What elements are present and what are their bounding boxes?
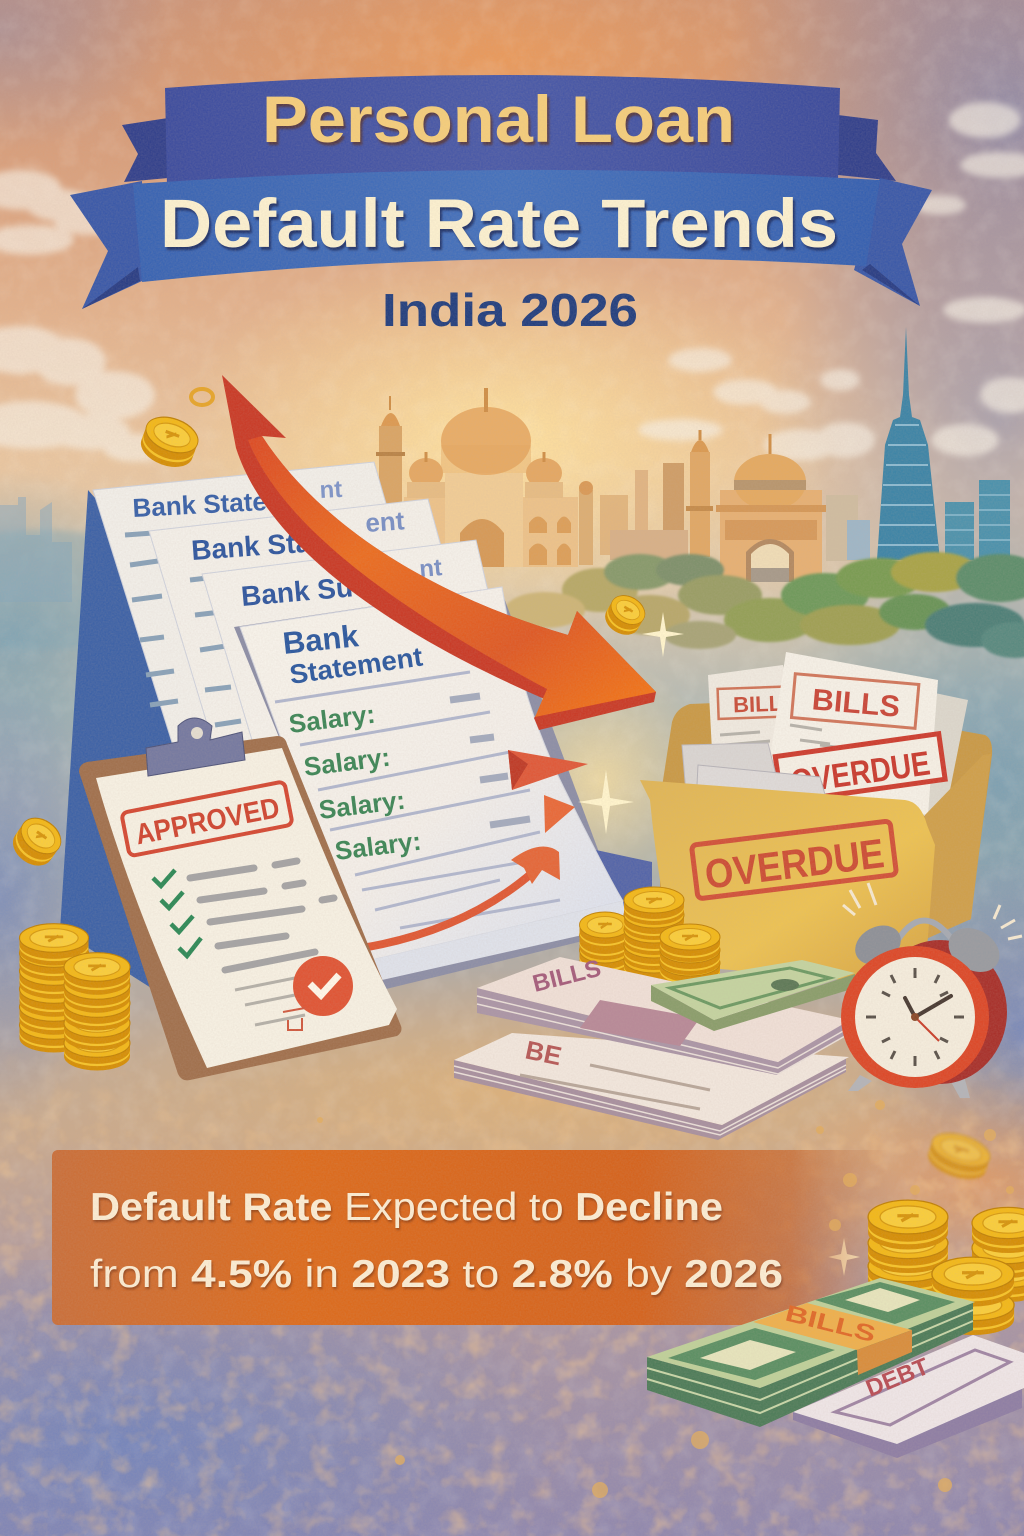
green banknotes bbox=[651, 960, 855, 1031]
statement sheet 3 bbox=[202, 540, 530, 800]
tucked sheets bbox=[682, 743, 778, 793]
callout line 2: from 4.5% in 2023 to 2.8% by 2026 bbox=[90, 1253, 783, 1296]
main bank statement bbox=[240, 587, 627, 980]
left coin stacks bbox=[20, 924, 130, 1070]
heading line 1: Personal Loan bbox=[262, 82, 735, 156]
salary rows: Salary: bbox=[287, 699, 377, 739]
lower bill stack: BE bbox=[523, 1035, 564, 1071]
bill right bbox=[765, 652, 938, 815]
form paper bbox=[96, 748, 397, 1068]
centre coin stacks bbox=[580, 887, 720, 988]
metal clip bbox=[146, 718, 245, 776]
heading line 2: Default Rate Trends bbox=[160, 185, 838, 262]
callout line 1: Default Rate Expected to Decline bbox=[90, 1186, 723, 1229]
debt paper: DEBT bbox=[862, 1353, 933, 1403]
overdue folder: BILL bbox=[733, 691, 782, 717]
green money bundle: BILLS bbox=[783, 1300, 878, 1347]
clipboard approved form bbox=[79, 718, 402, 1080]
statement sheet 2: Bank Sta bbox=[190, 527, 312, 566]
blurred floating coin bbox=[924, 1127, 994, 1185]
small red arrow triangles bbox=[508, 750, 588, 833]
sparkles bbox=[578, 612, 860, 1276]
blue corner behind statement bbox=[596, 850, 652, 922]
statement sheet 1: nt bbox=[319, 476, 343, 504]
statement sheet 1: Bank State bbox=[132, 486, 268, 523]
salary rows: Salary: bbox=[302, 742, 392, 782]
statement sheet 3: Bank Su bbox=[240, 571, 354, 612]
upper bill stack bbox=[477, 955, 850, 1075]
lower right coin stacks bbox=[868, 1200, 1024, 1335]
large overdue stamp: OVERDUE bbox=[702, 830, 887, 898]
hazy left city and hills bbox=[0, 497, 180, 650]
ribbon back tails bbox=[122, 115, 896, 182]
folder back bbox=[660, 700, 992, 920]
clock face bbox=[855, 957, 975, 1077]
clock body back bbox=[873, 940, 1007, 1084]
ringing marks bbox=[843, 883, 1022, 939]
ribbon front tails bbox=[70, 178, 932, 309]
blue binder backing bbox=[60, 490, 330, 1000]
debt paper bbox=[793, 1335, 1024, 1458]
back sheet right bbox=[923, 692, 968, 825]
rim bbox=[841, 946, 989, 1088]
treeline bbox=[505, 552, 1024, 658]
salary rows bbox=[287, 699, 423, 866]
statement sheet 1 bbox=[93, 462, 460, 800]
statement sheet 2: ent bbox=[364, 505, 406, 538]
landmark: towers and minaret bbox=[600, 430, 713, 560]
title banner bbox=[70, 75, 932, 309]
feet bbox=[848, 1075, 970, 1098]
overdue folder: BILLS bbox=[811, 683, 901, 724]
approved stamp: APPROVED bbox=[133, 792, 282, 851]
upper bill stack: BILLS bbox=[530, 955, 604, 998]
floating coins upper bbox=[6, 389, 650, 873]
alarm clock bbox=[841, 883, 1022, 1098]
bundle band bbox=[753, 1303, 912, 1350]
folder front bbox=[640, 780, 935, 980]
green money bundle bbox=[647, 1278, 975, 1427]
clouds bbox=[0, 102, 1024, 462]
callout panel bbox=[52, 1150, 892, 1325]
landmark: domed palace bbox=[376, 388, 593, 567]
rising red arrow on statement bbox=[362, 847, 560, 948]
landmark: blue skyscraper and towers bbox=[877, 327, 1010, 562]
bells bbox=[848, 918, 908, 972]
lower bill stack bbox=[454, 1033, 849, 1140]
large orange trend arrow bbox=[222, 375, 656, 730]
red seal bbox=[293, 956, 353, 1016]
salary rows: Salary: bbox=[333, 826, 423, 866]
scattered gold flecks bbox=[317, 1100, 1014, 1498]
small overdue stamp: OVERDUE bbox=[788, 744, 932, 802]
salary rows: Salary: bbox=[317, 785, 407, 825]
clipboard board bbox=[79, 736, 402, 1080]
subtitle: India 2026 bbox=[382, 284, 638, 336]
main bank statement: Bank bbox=[281, 618, 361, 661]
clock hands bbox=[905, 996, 951, 1017]
main bank statement: Statement bbox=[288, 642, 425, 690]
ribbon front bbox=[133, 170, 880, 282]
handle bbox=[893, 920, 958, 948]
checklist bbox=[153, 870, 201, 956]
statement book base bbox=[234, 587, 628, 990]
statement sheet 2 bbox=[149, 499, 500, 800]
statement sheet 3: nt bbox=[418, 554, 443, 583]
bill left bbox=[708, 665, 803, 770]
overdue folder bbox=[640, 652, 992, 980]
right flap bbox=[925, 754, 991, 939]
ribbon back bbox=[165, 75, 840, 186]
landmark: memorial arch bbox=[716, 434, 870, 582]
